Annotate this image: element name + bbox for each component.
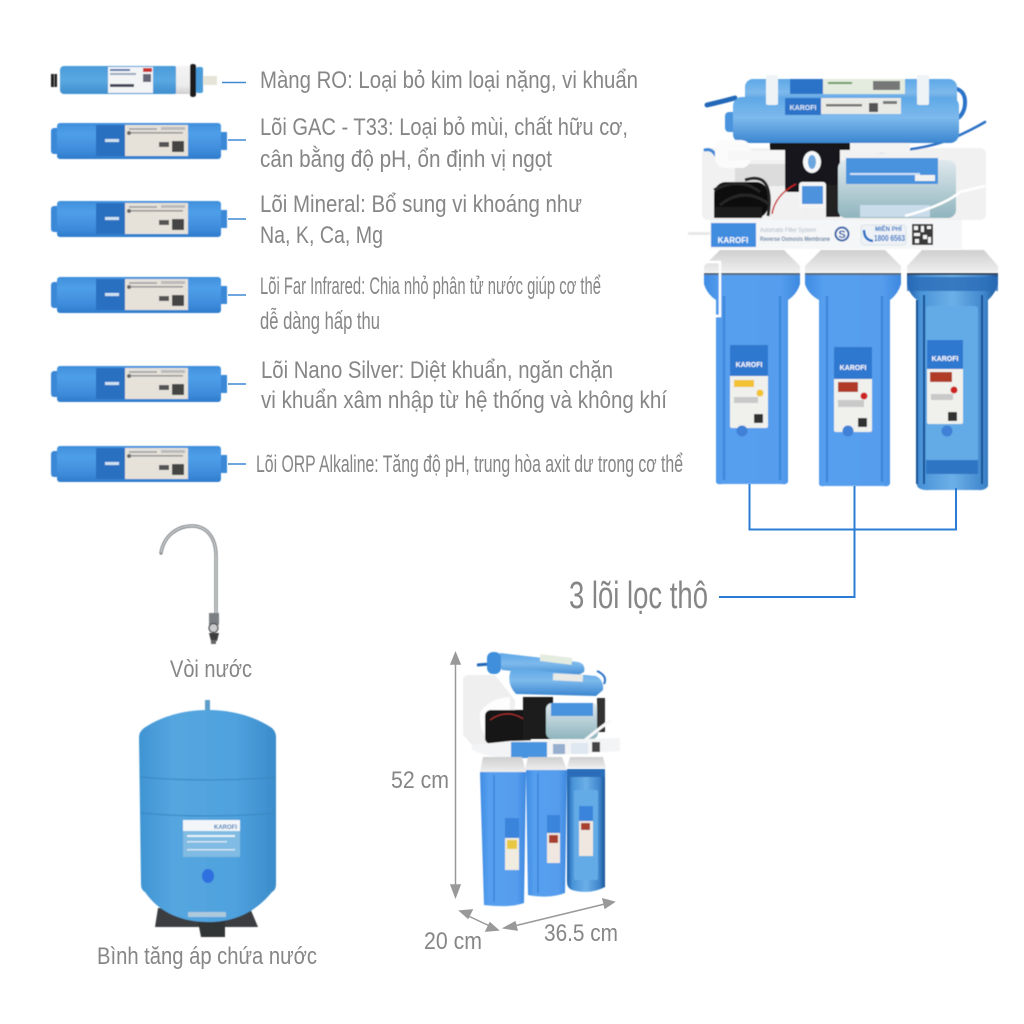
label: Nano Silver: vi khuẩn xâm nhập từ hệ thống và không khí	[261, 387, 667, 414]
label: depth 20 cm: 20 cm	[424, 928, 482, 955]
label: Nano Silver: Lõi Nano Silver: Diệt khuẩn, ngăn chặn	[261, 357, 613, 384]
icon: fittings and valve	[715, 140, 910, 192]
panel: control label strip: 1800 6563	[874, 234, 905, 243]
label: pressure tank: Bình tăng áp chứa nước	[97, 943, 317, 970]
arrow: ORP connector	[228, 463, 246, 465]
icon: pressure tank: KAROFI	[214, 825, 237, 831]
icon: ORP Alkaline cartridge	[51, 446, 227, 482]
icon: small purifier	[463, 652, 620, 906]
label: Mineral	[260, 191, 582, 249]
panel: control label strip	[688, 220, 962, 249]
icon: GAC cartridge	[51, 123, 227, 159]
icon: clear sump housing 3: KAROFI	[932, 356, 958, 363]
icon: front cartridge	[725, 75, 959, 143]
arrow: height	[451, 653, 460, 897]
connector: three pre-filters bracket	[719, 484, 956, 597]
label: Nano Silver	[261, 357, 667, 414]
label: Mineral: Na, K, Ca, Mg	[260, 222, 383, 249]
panel: control label strip: S	[838, 229, 846, 241]
icon: clear sump housing 3	[907, 250, 998, 490]
label: width 36.5 cm: 36.5 cm	[544, 920, 618, 947]
icon: Mineral cartridge	[51, 201, 227, 237]
arrow: Nano Silver connector	[228, 383, 246, 385]
arrow: Far Infrared connector	[228, 294, 246, 296]
icon: Nano Silver cartridge	[51, 366, 227, 402]
arrow: width	[504, 899, 614, 930]
panel: control label strip: Automatic Filter System	[760, 227, 816, 234]
label: RO membrane: Màng RO: Loại bỏ kim loại nặng, vi khuẩn	[260, 67, 638, 94]
icon: solenoid valve	[799, 182, 840, 217]
icon: Far Infrared cartridge	[51, 277, 227, 313]
icon: RO membrane	[51, 64, 217, 97]
label: GAC T33: Lõi GAC - T33: Loại bỏ mùi, chất hữu cơ,	[260, 114, 628, 141]
label: ORP Alkaline: Lõi ORP Alkaline: Tăng độ pH, trung hòa axit dư trong cơ thể	[256, 451, 683, 478]
arrow: GAC connector	[228, 139, 246, 141]
label: Far Infrared: dễ dàng hấp thu	[260, 308, 380, 335]
icon: back cartridge	[745, 79, 957, 109]
arrow: depth	[460, 910, 498, 931]
arrow: Mineral connector	[228, 218, 246, 220]
label: height 52 cm: 52 cm	[391, 767, 449, 794]
panel: control label strip: Reverse Osmosis Membrane	[760, 236, 830, 243]
icon: sump housing 2	[805, 250, 901, 486]
label: faucet: Vòi nước	[170, 656, 252, 683]
label: Mineral: Lõi Mineral: Bổ sung vi khoáng như	[260, 191, 582, 218]
icon: pump	[838, 158, 985, 218]
panel: control label strip: MIỄN PHÍ	[875, 225, 902, 233]
icon: sump housing 1	[704, 250, 800, 484]
icon: sump housing 1: KAROFI	[736, 362, 762, 369]
label: GAC T33	[260, 114, 628, 173]
icon: faucet	[161, 526, 219, 644]
icon: power cable bundle	[714, 178, 796, 218]
icon: pressure tank	[139, 700, 276, 937]
icon: sump housing 2: KAROFI	[840, 365, 866, 372]
icon: front cartridge: KAROFI	[790, 105, 816, 112]
label: GAC T33: cân bằng độ pH, ổn định vị ngọt	[260, 146, 552, 173]
icon: hoses	[705, 88, 985, 159]
label: Far Infrared: Lõi Far Infrared: Chia nhỏ phân tử nước giúp cơ thể	[260, 273, 601, 300]
panel: machine dimensions	[391, 652, 620, 955]
arrow: RO connector	[222, 82, 246, 84]
panel: filter cartridges list	[51, 64, 683, 482]
label: Far Infrared	[260, 273, 601, 335]
panel: control label strip: KAROFI	[718, 236, 748, 245]
panel: main purifier machine	[688, 75, 998, 490]
label: 3 pre-filters: 3 lõi lọc thô	[569, 575, 708, 617]
